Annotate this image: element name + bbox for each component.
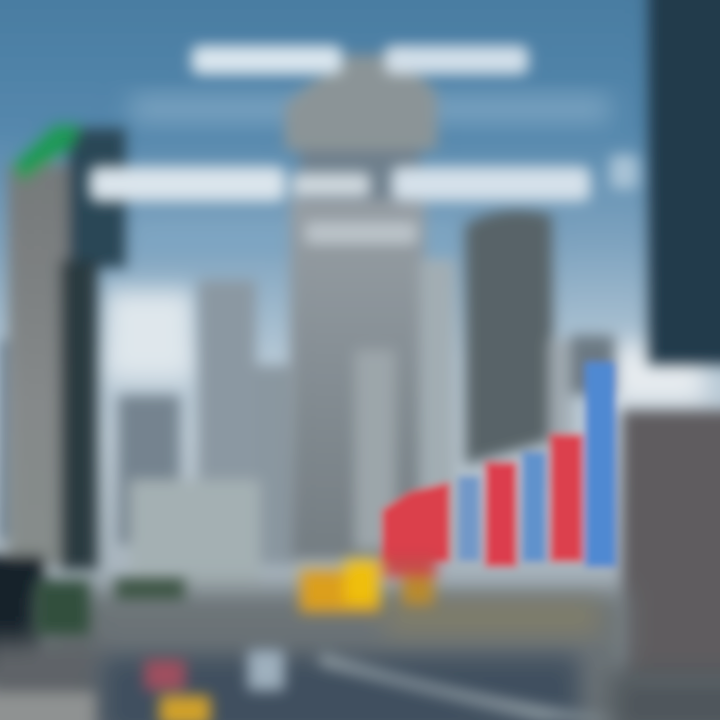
building: dark tower right of centre [465, 209, 615, 490]
headline: blurred second line [90, 155, 638, 201]
building: central tower [285, 55, 455, 560]
yellow vehicles and signage [145, 555, 437, 720]
distant buildings [0, 280, 295, 590]
street level [0, 578, 720, 720]
bar chart: red and blue bars [382, 362, 616, 567]
headline: blurred third line [305, 222, 417, 244]
building: left tower with green roof [0, 125, 126, 675]
building: dark foreground tower at right edge [622, 0, 720, 680]
headline: blurred top line [192, 46, 528, 74]
